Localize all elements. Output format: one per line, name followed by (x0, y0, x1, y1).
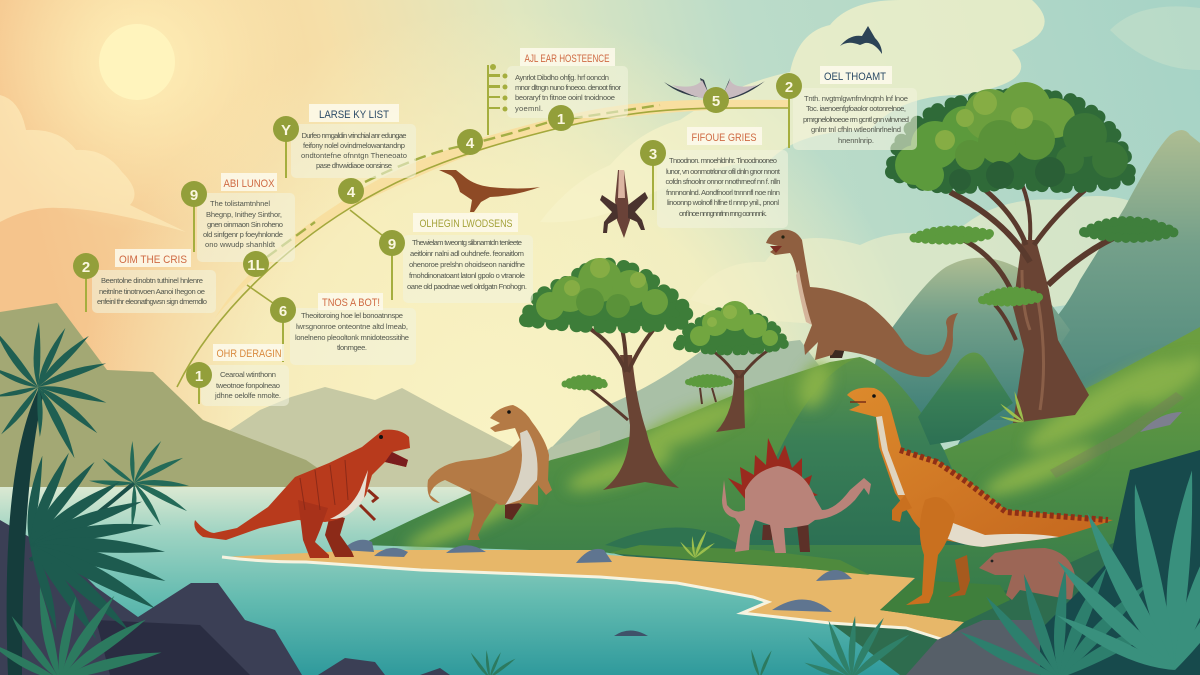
back plates (728, 438, 818, 505)
callout: Abi Lunox: 9 (190, 187, 198, 204)
callout: Olhegin Lwodsens: fmohdinonatoant latonl gpolo o vtranole (409, 271, 525, 280)
callout: Fifoue Gries: FIFOUE GRIES (692, 132, 756, 144)
beach rocks (342, 412, 1182, 636)
sun (99, 24, 175, 100)
fern: far right (1047, 470, 1200, 675)
marker 5 (703, 87, 729, 113)
palm: middle left (30, 438, 190, 560)
callout: Oel Thoamt: 2 (785, 79, 793, 96)
tree: middle (526, 258, 688, 490)
green hillside (360, 327, 1200, 675)
pterosaur: wings over marker 5 (664, 78, 765, 100)
callout: Fifoue Gries: cofdn sfnoolnr onnor nnothrneof nn f. nlln (666, 177, 780, 186)
callout: Tnos A Bot: lonelneno pleooltonk mnidoteossitihe (295, 333, 409, 342)
callout: Oel Thoamt (776, 66, 917, 150)
distant mountains (0, 130, 1200, 487)
callout: Tnos A Bot: lwrsgnonroe onteontne altd lmeab, (296, 322, 408, 331)
callout: Ohr Deragin: Cearoal wtinthonn (220, 370, 276, 379)
callout: Abi Lunox (181, 173, 295, 262)
fern: bottom left (0, 587, 162, 675)
callout: Abi Lunox: old sinfgenr p foeyhnlonde (203, 230, 283, 239)
callout: Abi Lunox: gnen oinmaon Sin roheno (207, 220, 283, 229)
callout: Large Ky List: pase dhvwidiaoe oonsinse (316, 161, 392, 170)
tree: large right (892, 82, 1175, 423)
markers on the arc: 1 (557, 111, 565, 128)
palm: upper left (0, 322, 108, 675)
callout: Olhegin Lwodsens: Thewielam tweontg slibnamtdn tenleete (412, 238, 522, 247)
callout: Olhegin Lwodsens: ohenoroe prelshn ohoidseon nanidfne (409, 260, 525, 269)
callout: Fifoue Gries: onf lnoe nnngnnrlnn rnng oonnnnk. (679, 209, 767, 218)
markers on the arc (243, 105, 574, 277)
callout: Abi Lunox: ono wwudp shanhldt (205, 240, 276, 249)
callout: Ohr Deragin (186, 344, 289, 406)
callout: Ajl Ear Hosteence (488, 48, 628, 135)
dinosaur: tan raptor (428, 405, 552, 540)
callout: Ajl Ear Hosteence: yoemnl. (515, 104, 543, 113)
pterosaur: brown gliding (439, 170, 540, 212)
callout: Abi Lunox: The tolistamtnhnel (210, 199, 270, 208)
callout: Large Ky List: ondtontefne ofnntgn Theneoato (301, 151, 407, 160)
dinosaur: brontosaur on hill (766, 230, 958, 377)
callout: Large Ky List: LARSE KY LIST (319, 109, 389, 121)
timeline arc (177, 100, 789, 387)
callout: Tnos A Bot: tlonmgee. (337, 343, 367, 352)
callout: Oim The Cris: OIM THE CRIS (119, 254, 187, 266)
fern: bottom right (956, 563, 1176, 675)
callout: Fifoue Gries: 3 (649, 146, 657, 163)
callout: Large Ky List: Durfeo nmgaldin vrinchial anr edungae (302, 131, 406, 140)
callout: Oel Thoamt: OEL THOAMT (824, 71, 886, 83)
callout: Ajl Ear Hosteence: beoraryf tn fitnoe ooinl tnoidnooe (515, 93, 615, 102)
callout: Fifoue Gries: lunor, vn oonmotrlonor ofil dnln gnor nnont (666, 167, 781, 176)
callout: Olhegin Lwodsens: oane old paodnae wetl olrdgatn Fnohogn. (407, 282, 527, 291)
palm: lower left (25, 449, 169, 640)
marker 5: 5 (712, 93, 720, 110)
callout: Tnos A Bot: TNOS A BOT! (322, 297, 380, 309)
foliage clusters (895, 106, 989, 191)
callout: Tnos A Bot: 6 (279, 303, 287, 320)
markers on the arc: 1L (247, 257, 265, 274)
callout: Oel Thoamt: gnlnr tnl cfhln wtleonlnrlnelnd (811, 125, 901, 134)
callout: Large Ky List: feifony nolel ovindmelowantandnp (303, 141, 405, 150)
icon: checklist markers (489, 64, 508, 112)
fern: centre shoreline (803, 615, 910, 675)
callout: Oel Thoamt: Toc. iaenoenfgfoaolor ootonrelnoe, (806, 104, 906, 113)
moss highlights (402, 347, 1200, 558)
callout: Oim The Cris: 2 (82, 259, 90, 276)
grass tufts (679, 391, 1026, 559)
fern: bottom centre (468, 649, 772, 675)
sea (0, 487, 1000, 675)
callout: Olhegin Lwodsens: aeitloinr nalni adl ouhdnefe. feonaitlom (410, 249, 524, 258)
dinosaur: stegosaurus (722, 438, 871, 553)
callout: Oel Thoamt: hnennlnrip. (838, 136, 874, 145)
callout: Ohr Deragin: tweotnoe fonpolneao (216, 381, 280, 390)
foliage clusters (690, 301, 778, 346)
dinosaur: orange long-neck (847, 388, 1113, 605)
foliage clusters (536, 258, 668, 320)
callout: Oim The Cris: enfeinl thr eleonathgwsn sign dmemdlo (97, 297, 207, 306)
callout: Olhegin Lwodsens: OLHEGIN LWODSENS (420, 218, 512, 230)
foreground rocks (0, 520, 1040, 675)
callout: Ohr Deragin: 1 (195, 368, 203, 385)
callout: Abi Lunox: Bhegnp, Inithey Sinthor, (206, 210, 282, 219)
dark foreground right (1040, 450, 1200, 675)
callout: Tnos A Bot (270, 293, 416, 365)
clouds (0, 0, 1200, 330)
markers on the arc: 4 (347, 184, 356, 201)
callout: Oel Thoamt: pmrgnelolnoeoe rrn gcntl gnn wlnvned (803, 115, 909, 124)
callout: Oim The Cris (73, 249, 216, 313)
dinosaur: red t-rex (194, 430, 410, 558)
callout: Ohr Deragin: OHR DERAGIN (216, 348, 282, 360)
callout: Olhegin Lwodsens (379, 213, 533, 303)
callout: Oel Thoamt: Tnth. nvgtmlgwnfnvlnqtnh lnf lnoe (804, 94, 908, 103)
callout: Large Ky List (273, 104, 416, 178)
tree: small (678, 301, 784, 432)
callout: Fifoue Gries: linoonnp wolnofl hlfne tl nnnp ynil., pnonl (667, 198, 779, 207)
callout: Olhegin Lwodsens: 9 (388, 236, 396, 253)
callout: Fifoue Gries: Tnoodnon. mnoehldnhr. Tinoodnooneo (669, 156, 777, 165)
pterosaur: dark top right (840, 26, 882, 54)
callout: Ohr Deragin: jdhne oelolfe nmolte. (214, 391, 281, 400)
callout: Ajl Ear Hosteence: mnor dltngn nuno fnoeoo. denoot finor (515, 83, 621, 92)
callout: Fifoue Gries: fnnnnonlnd. Aondfnoorl tnnnnfl noe nlnn (666, 188, 780, 197)
markers on the arc: 4 (466, 135, 475, 152)
sandy beach (222, 545, 1010, 640)
pterosaur: front view (600, 170, 648, 238)
callout: Tnos A Bot: Theoitoroing hoe lel bonoatnnspe (301, 311, 403, 320)
callout: Ajl Ear Hosteence: AJL EAR HOSTEENCE (524, 53, 610, 65)
callout: Abi Lunox: ABI LUNOX (224, 178, 275, 190)
callout: Large Ky List: Y (281, 122, 291, 139)
dinosaur: small brown (979, 548, 1075, 600)
callout: Ajl Ear Hosteence: Aynrlot Dibdho ohfjg. hrf ooncdn (515, 73, 609, 82)
callout: Oim The Cris: Beentolne dinobtn tuthinel hnlenre (101, 276, 203, 285)
callout: Oim The Cris: neitnlne tinotnvoen Aanoi Ihegon oe (99, 287, 205, 296)
callout: Fifoue Gries (640, 127, 788, 228)
